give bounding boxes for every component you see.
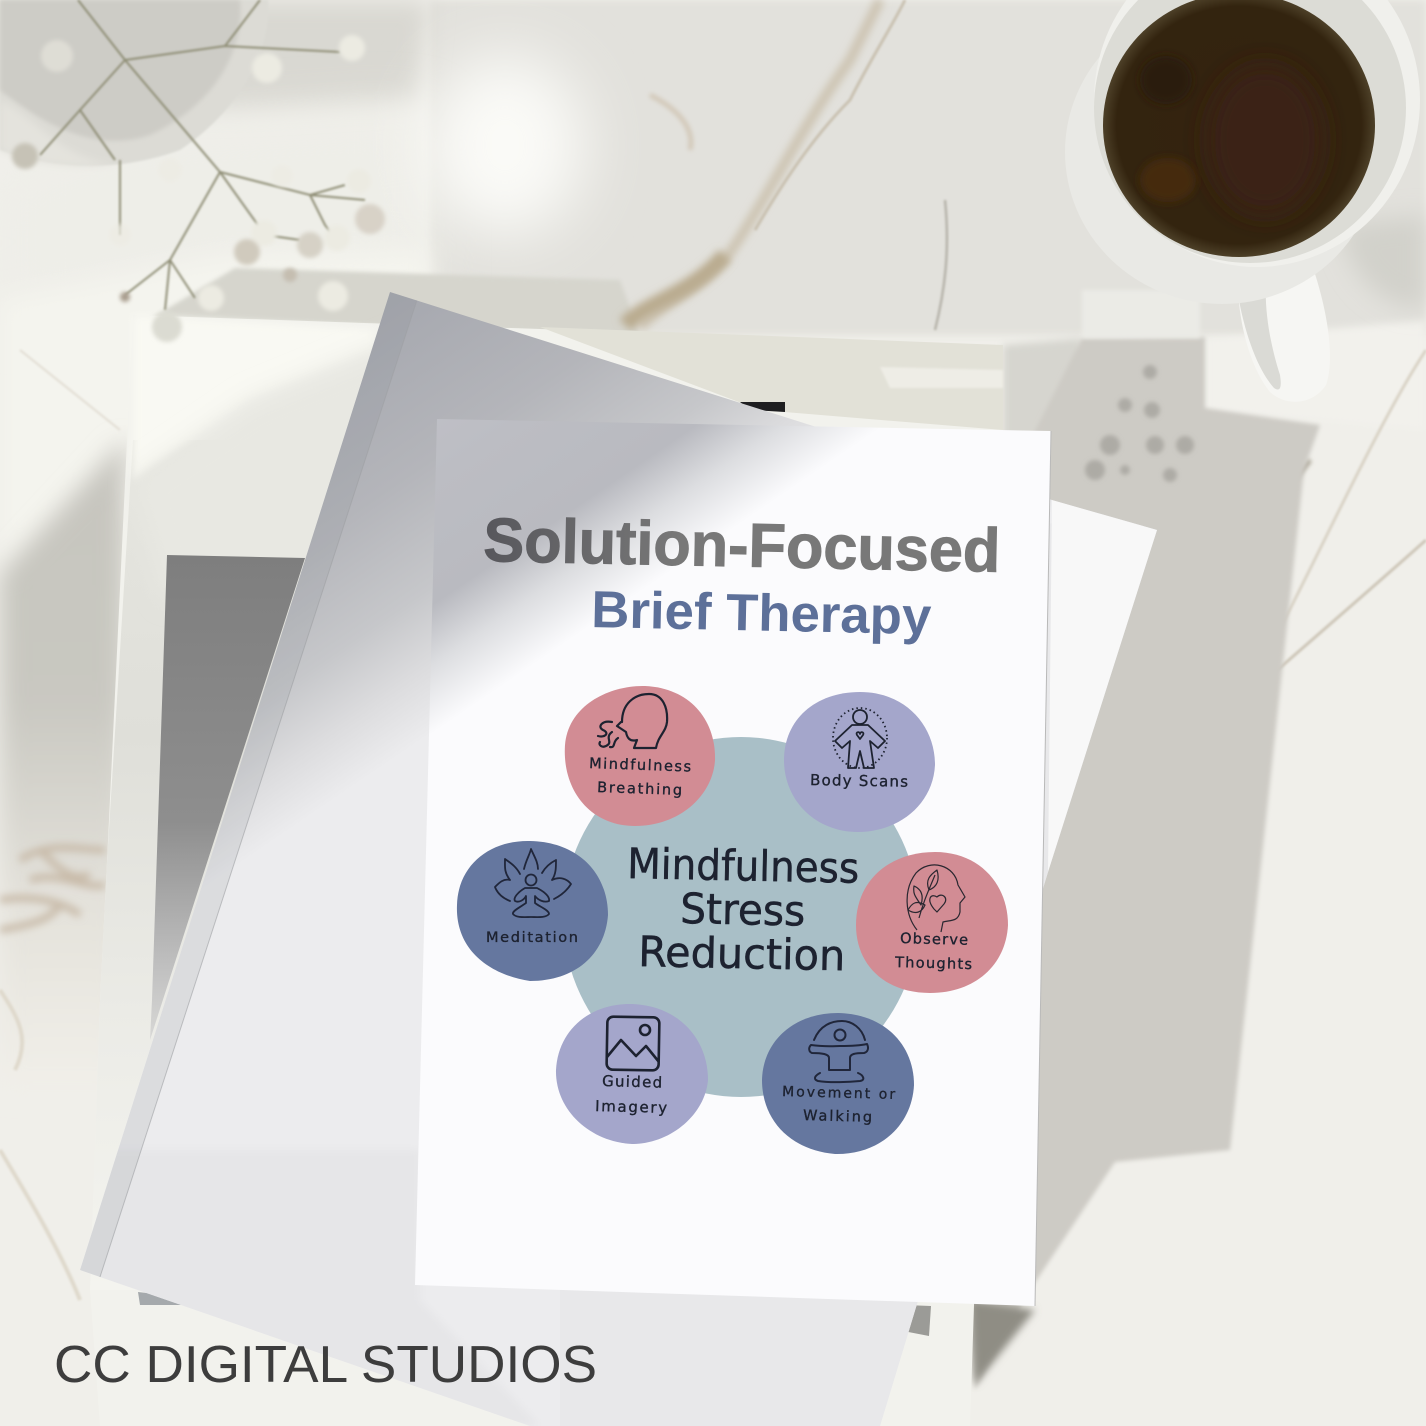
icon: image frame [607, 1017, 659, 1070]
bottom white book [90, 315, 1003, 1426]
bubble: Movement or Walking: Movement or [782, 1084, 896, 1103]
icon: lotus meditation [495, 849, 571, 917]
brand: CC DIGITAL STUDIOS: CC DIGITAL STUDIOS [54, 1336, 597, 1394]
icon: body scan figure [833, 708, 887, 768]
bubble: Guided Imagery: Imagery [595, 1097, 667, 1117]
baby's breath sprig [12, 0, 385, 342]
coffee surface [1103, 0, 1375, 257]
central circle: Mindfulness Stress Reduction [563, 737, 919, 1097]
bubble: Movement or Walking [762, 1013, 914, 1154]
vase bowl top left [0, 0, 268, 166]
bubble: Guided Imagery [556, 1004, 708, 1144]
central circle: Mindfulness Stress Reduction: Reduction [638, 927, 846, 980]
grey square on book cover [150, 555, 305, 1040]
central circle: Mindfulness Stress Reduction: Mindfulness [627, 839, 860, 893]
bubble: Mindfulness Breathing [565, 686, 715, 826]
bubble: Body Scans [784, 692, 935, 832]
bubble: Movement or Walking: Walking [803, 1108, 872, 1126]
cast shadow: books on marble [960, 290, 1320, 1390]
bubble: Meditation: Meditation [486, 930, 578, 946]
icon: movement figure [809, 1021, 868, 1082]
bubble: Meditation [457, 841, 608, 981]
bubble: Observe Thoughts [856, 852, 1008, 993]
icon: head with leaves and heart [907, 865, 965, 932]
grey middle book [60, 280, 1170, 1426]
central circle: Mindfulness Stress Reduction: Stress [680, 884, 806, 936]
title: Solution-Focused: Solution-Focused [483, 506, 1001, 586]
subtitle: Brief Therapy: Brief Therapy [591, 581, 932, 646]
white card [415, 419, 1051, 1306]
bubble: Guided Imagery: Guided [602, 1072, 662, 1092]
bubble: Mindfulness Breathing: Breathing [597, 780, 682, 799]
shadow sprig on marble [1085, 365, 1194, 482]
coffee cup [1065, 0, 1426, 402]
bubble: Observe Thoughts: Observe [900, 931, 968, 949]
icon: head breathing [598, 694, 667, 748]
bubble: Observe Thoughts: Thoughts [894, 955, 972, 973]
bubble: Mindfulness Breathing: Mindfulness [589, 756, 691, 776]
bubble: Body Scans: Body Scans [810, 771, 908, 791]
